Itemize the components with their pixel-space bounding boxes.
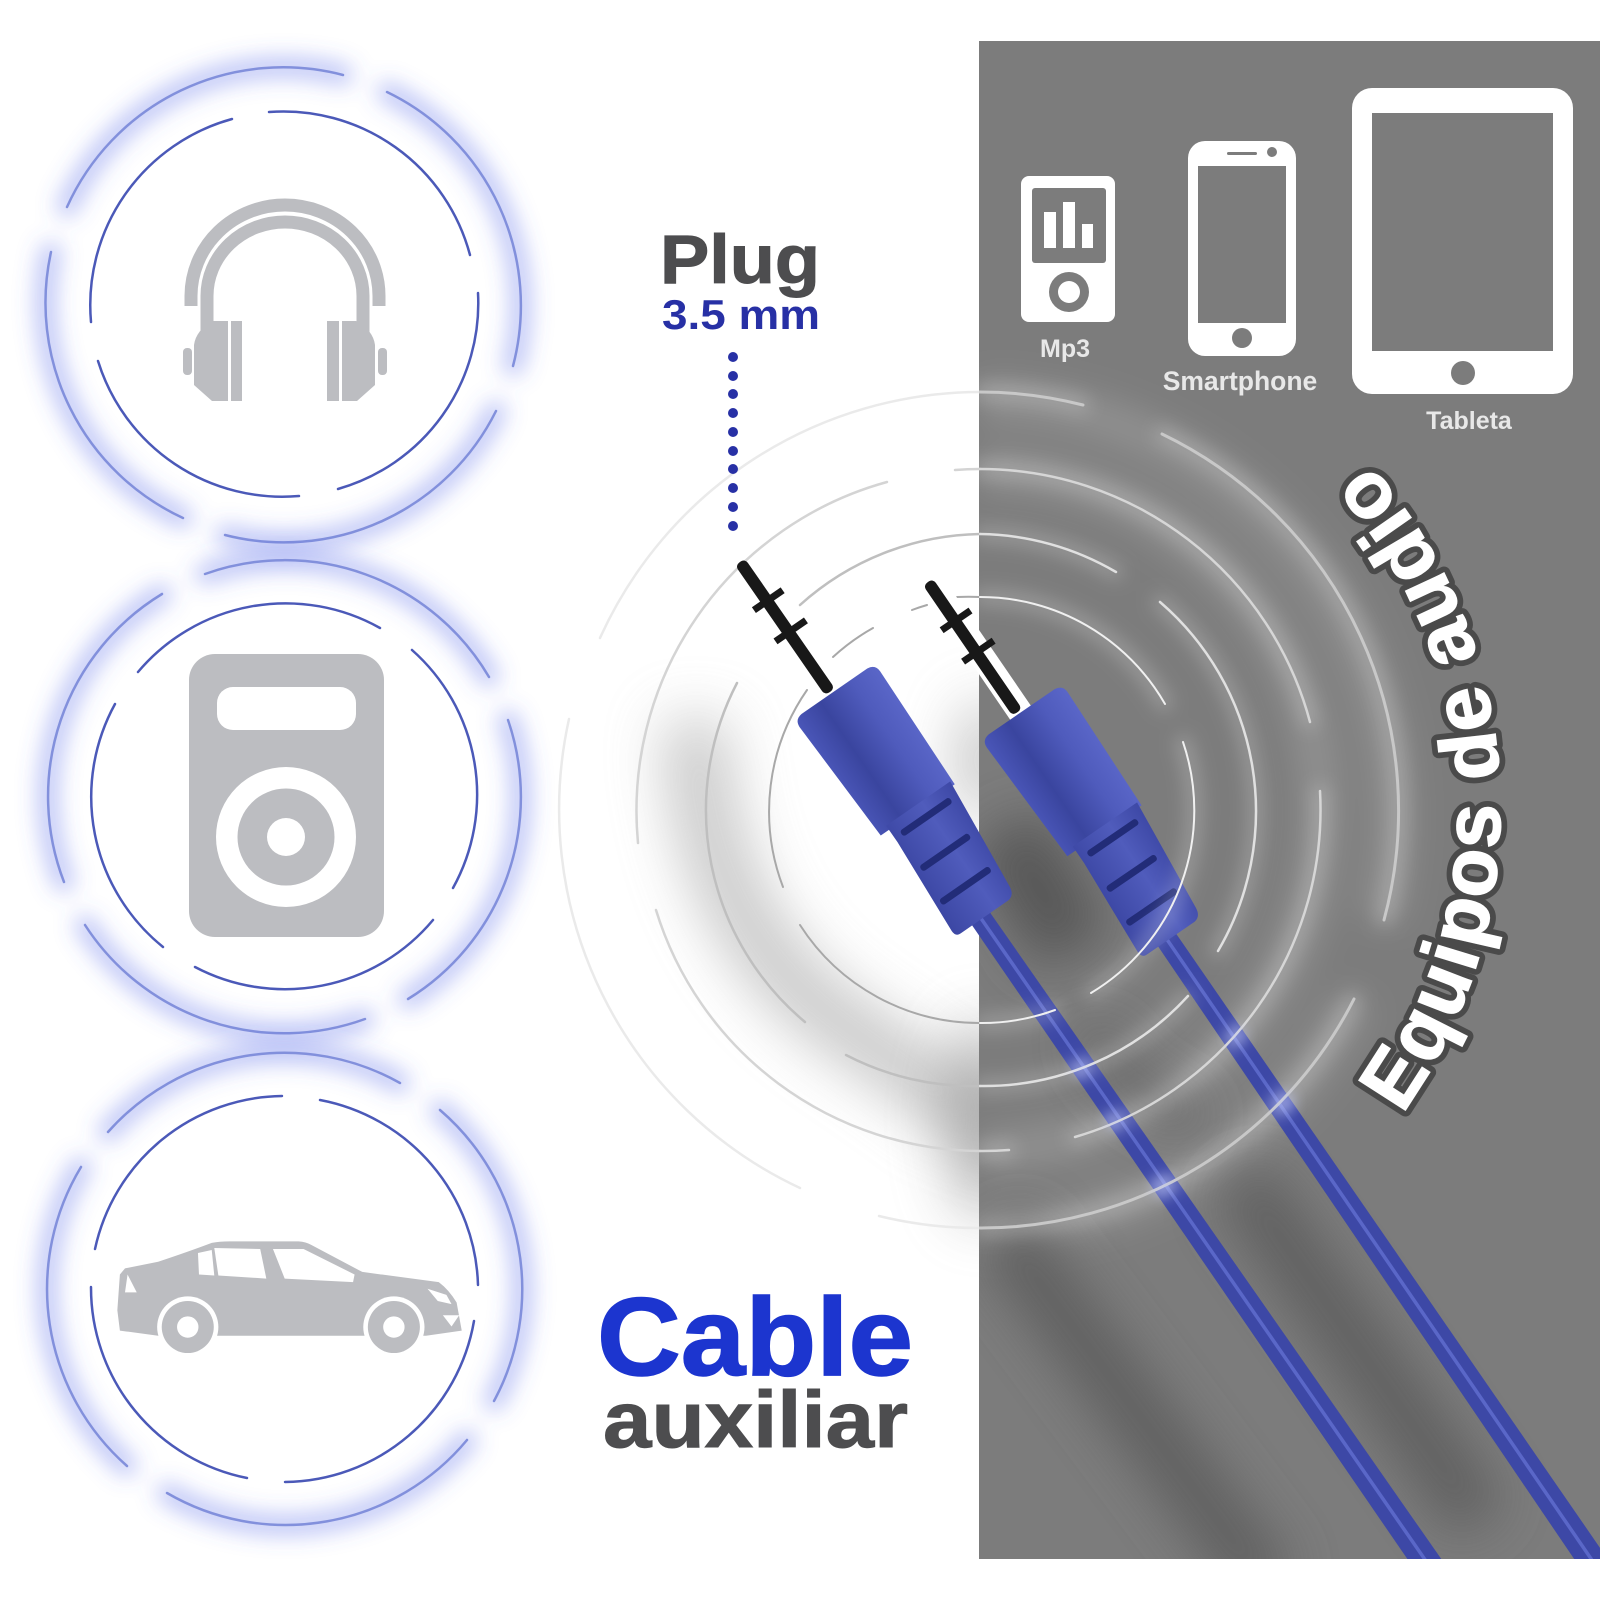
dotted leader line xyxy=(728,352,738,531)
sound rings: left side xyxy=(559,392,980,1228)
title: Cable: Cable xyxy=(597,1276,913,1399)
label: Tableta: Tableta xyxy=(1426,407,1513,435)
label: Smartphone: Smartphone xyxy=(1163,366,1317,396)
icon: mp3 player xyxy=(1021,176,1115,322)
background shadow behind left plug xyxy=(695,700,1021,1220)
icon: headphones xyxy=(183,205,387,401)
device ring: headphones xyxy=(45,67,521,542)
icon: smartphone xyxy=(1188,141,1296,356)
cable and plug: right xyxy=(925,580,1600,1559)
cable and plug: left xyxy=(737,560,1442,1559)
title: auxiliar: auxiliar xyxy=(603,1375,908,1464)
device ring: car xyxy=(47,1053,522,1525)
icon: speaker xyxy=(189,654,384,937)
icon: tablet xyxy=(1352,88,1573,394)
heading: Plug: Plug xyxy=(660,221,820,298)
sound rings: right side xyxy=(980,392,1399,1228)
curved heading: Equipos de audio: Equipos de audio xyxy=(1339,467,1508,1116)
device ring: speaker xyxy=(48,560,521,1033)
panel: audio devices xyxy=(979,41,1600,1590)
icon: car xyxy=(117,1241,462,1358)
heading: 3.5 mm: 3.5 mm xyxy=(662,291,820,338)
label: Mp3: Mp3 xyxy=(1040,335,1090,363)
